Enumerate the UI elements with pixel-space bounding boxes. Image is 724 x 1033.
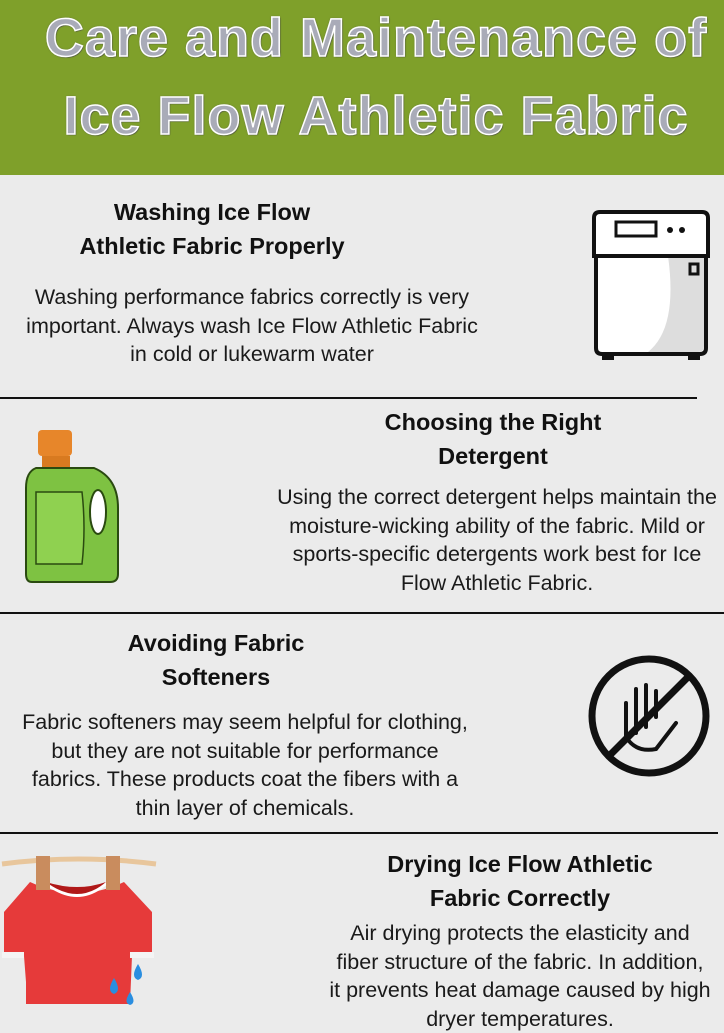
text: washing — [26, 285, 478, 366]
title: Care and Maintenance of — [45, 8, 707, 68]
header banner — [0, 0, 724, 175]
text: drying: Air drying protects the elasticity and — [350, 921, 690, 945]
text: drying: it prevents heat damage caused by high — [329, 978, 711, 1002]
text: detergent: sports-specific detergents work best for Ice — [293, 542, 701, 566]
text: drying: dryer temperatures. — [426, 1006, 614, 1030]
text: drying: fiber structure of the fabric. In addition, — [337, 950, 703, 974]
text: softeners: fabrics. These products coat the fibers with a — [32, 767, 458, 791]
icon: washing machine — [592, 210, 710, 360]
text: detergent: moisture-wicking ability of the fabric. Mild or — [289, 514, 705, 538]
text: washing: important. Always wash Ice Flow Athletic Fabric — [26, 314, 478, 338]
text: softeners: Fabric softeners may seem helpful for clothing, — [22, 710, 468, 734]
heading: washing: Washing Ice Flow — [114, 199, 310, 225]
heading: detergent: Detergent — [438, 443, 548, 469]
icon: detergent bottle — [25, 430, 119, 583]
text: softeners — [22, 710, 468, 820]
icon: no-hand — [588, 656, 710, 776]
title — [45, 8, 708, 146]
heading: washing: Athletic Fabric Properly — [79, 233, 345, 259]
heading: drying — [387, 851, 653, 911]
heading: drying: Fabric Correctly — [430, 885, 610, 911]
title: Ice Flow Athletic Fabric — [63, 86, 689, 146]
heading: softeners: Softeners — [162, 664, 270, 690]
text: softeners: but they are not suitable for performance — [51, 738, 439, 762]
text: washing: Washing performance fabrics correctly is very — [35, 285, 469, 309]
heading: softeners: Avoiding Fabric — [128, 630, 304, 656]
heading: softeners — [128, 630, 304, 690]
text: washing: in cold or lukewarm water — [130, 342, 374, 366]
heading: washing — [79, 199, 345, 259]
text: detergent: Using the correct detergent helps maintain the — [277, 485, 717, 509]
text: drying — [329, 921, 711, 1030]
heading: detergent — [385, 409, 602, 469]
text: softeners: thin layer of chemicals. — [136, 796, 354, 820]
text: detergent: Flow Athletic Fabric. — [401, 570, 593, 594]
text: detergent — [277, 485, 717, 594]
heading: drying: Drying Ice Flow Athletic — [387, 851, 653, 877]
icon: t-shirt drying — [2, 856, 156, 1005]
heading: detergent: Choosing the Right — [385, 409, 601, 435]
